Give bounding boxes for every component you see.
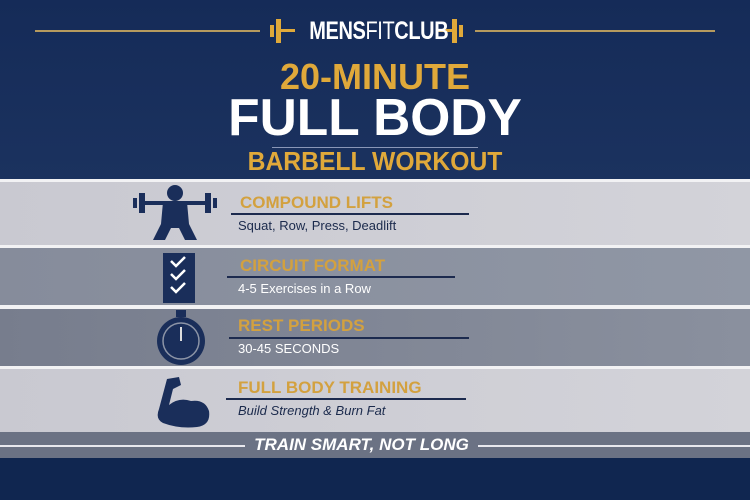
panel: rest periods: REST PERIODS bbox=[238, 316, 365, 335]
icon: squat bbox=[133, 185, 217, 240]
title: barbell workout: BARBELL WORKOUT bbox=[248, 146, 502, 176]
panel: rest periods bbox=[0, 309, 750, 366]
title: full body: FULL BODY bbox=[228, 89, 522, 147]
bottom navy bbox=[0, 458, 750, 500]
white separators bbox=[0, 179, 750, 432]
header background bbox=[0, 0, 750, 179]
panel: circuit format bbox=[0, 248, 750, 305]
icon: checklist bbox=[163, 253, 195, 303]
panel: rest periods: 30-45 SECONDS bbox=[238, 341, 339, 356]
text: COMPOUND LIFTS bbox=[240, 193, 393, 212]
panel: full body training: Build Strength & Burn Fat bbox=[238, 403, 385, 418]
panel: compound lifts bbox=[0, 182, 750, 245]
logo: MENSFITCLUB bbox=[309, 17, 448, 45]
panel: compound lifts: Squat, Row, Press, Deadlift bbox=[238, 218, 396, 233]
panel: full body training bbox=[0, 369, 750, 432]
tagline: TRAIN SMART, NOT LONG bbox=[254, 435, 469, 454]
header gold rules bbox=[35, 30, 260, 32]
panel: full body training: FULL BODY TRAINING bbox=[238, 378, 422, 397]
panel: circuit format: 4-5 Exercises in a Row bbox=[238, 281, 371, 296]
icon: stopwatch bbox=[157, 310, 205, 365]
footer banner bbox=[0, 432, 750, 458]
icon: flexed arm bbox=[158, 377, 210, 428]
title: 20-minute: 20-MINUTE bbox=[280, 56, 470, 97]
panel: circuit format: CIRCUIT FORMAT bbox=[240, 256, 385, 275]
